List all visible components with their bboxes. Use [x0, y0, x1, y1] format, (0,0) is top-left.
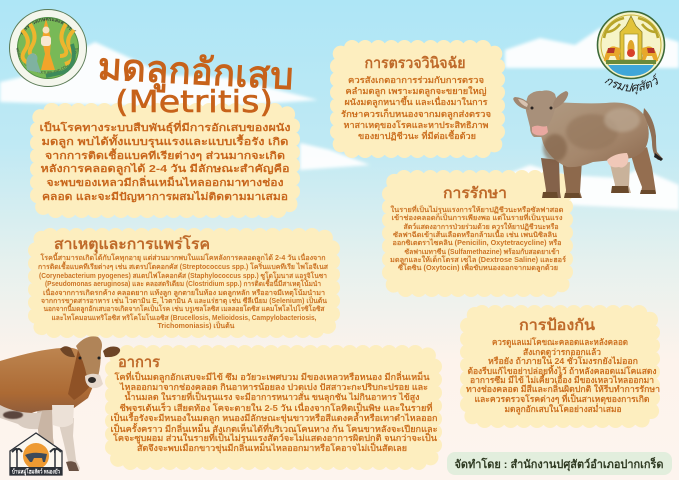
heading: prevention: การป้องกัน [519, 317, 596, 334]
prevention text: และควรตรวจโรคต่างๆ ที่เป็นสาเหตุของการเกิด [474, 392, 650, 405]
intro text [40, 120, 291, 203]
panel: symptoms [110, 353, 438, 462]
panel: causes [36, 234, 332, 330]
prevention text: หรือยัง ถ้าภายใน 24 ชั่วโมงรกยังไม่ออก [488, 354, 638, 366]
clouds [0, 28, 679, 210]
footer: organiser [447, 452, 672, 475]
icon: ministry of agriculture emblem: กระทรวงเกษตรและสหกรณ์ [20, 18, 76, 35]
prevention text [466, 337, 660, 415]
diagnosis text: หาสาเหตุของโรคและหาประสิทธิภาพ [344, 120, 489, 131]
causes text [38, 251, 329, 330]
panel: diagnosis [338, 48, 497, 150]
panel: intro [38, 111, 292, 210]
diagnosis text: ผนังมดลูกหนาขึ้น และเนื่องมาในการ [344, 95, 488, 108]
cow: left [0, 336, 120, 471]
causes text: โรคนี้สามารถเกิดได้กับโคทุกอายุ แต่ส่วนมากพบในแม่โคหลังการคลอดลูกได้ 2-4 วัน เนื่องจาก [39, 251, 325, 263]
prevention text: ต้องรีบแก้ไขอย่าปล่อยทิ้งไว้ ถ้าหลังคลอดแม่โคแสดง [468, 364, 656, 376]
treatment text: เข้าช่องคลอดก็เป็นการเพียงพอ แต่ในรายที่เป็นรุนแรง [392, 212, 563, 222]
symptoms text: สัดจึงจะพบเมือกขาวขุ่นมีกลิ่นเหม็นไหลออกมาหรือโคอาจไม่เป็นสัดเลย [137, 441, 407, 454]
causes text: จากการขาดสารอาหาร เช่น ไวตามิน E, ไวตามิน A และแร่ธาตุ เช่น ซีลีเนียม (Selenium) เป็นต้น [41, 296, 327, 305]
causes text: การติดเชื้อแบคทีเรียต่างๆ เช่น สเตรปโตคอกคัส (Streptococcus spp.) โคริ่นแบคทีเรีย ไพโอจีเนส [38, 260, 329, 271]
symptoms text: เป็นครั้งคราว มีกลิ่นเหม็น สังเกตเห็นได้ที่บริเวณโคนหาง ก้น โคนขาหลังจะเปียกและ [110, 422, 438, 434]
prevention text: สังเกตดูว่ารกออกแล้ว [523, 347, 601, 358]
intro text: คลอด และจะมีปัญหาการผสมไม่ติดตามมาเสมอ [42, 190, 288, 203]
causes text: และไทโคมอนแทริโอซิส ทริโคโมโนเอซิส (Brucellosis, Melioidosis, Campylobacteriosis, [52, 313, 317, 322]
causes text: นอกจากนี้มดลูกอักเสบอาจเกิดจากโคเป็นโรค เช่น บรูเซลโลซิส เมลลอยโดซิส แคมโพโลไปโรซิโอซิส [44, 302, 325, 314]
causes text: เนื่องจากการเกิดรกค้าง คลอดยาก แท้งลูก ลูกตายในท้อง มดลูกหลัก หรืออาจมีเหตุโน้มนำมา [43, 287, 325, 298]
intro text: จะพบของเหลวมีกลิ่นเหม็นไหลออกมาทางช่อง [46, 175, 284, 189]
heading: treatment: การรักษา [443, 185, 507, 202]
icon: ministry of agriculture emblem: MINISTRY OF AGRICULTURE AND COOPERATIVES [16, 48, 78, 74]
title: มดลูกอักเสบ [97, 46, 295, 100]
panel: treatment [390, 178, 566, 289]
symptoms text: โคจะซูบผอม ส่วนในรายที่เป็นไม่รุนแรงสัตว์จะไม่แสดงอาการผิดปกติ จนกว่าจะเป็น [112, 431, 437, 444]
icon: farm logo: บ้านหมู่โฮมสัตว์ หนองบัว [12, 468, 60, 476]
intro text: เป็นโรคทางระบบสืบพันธุ์ที่มีการอักเสบของผนัง [40, 120, 291, 134]
symptoms text [110, 370, 438, 454]
treatment text: ซี่โตซิน (Oxytocin) เพื่อขับหนองออกจากมดลูกด้วย [398, 262, 558, 273]
intro text: มดลูก พบได้ทั้งแบบรุนแรงและแบบเรื้อรัง เกิด [42, 134, 288, 149]
icon: department of livestock emblem [598, 12, 664, 78]
causes text: (Pseudomonas aeruginosa) และ คลอสตริเดียม (Clostridium spp.) การติดเชื้อนี้มีสาเหตุโน้มนำ [45, 277, 321, 288]
title [97, 46, 295, 120]
intro text: หลังการคลอดลูกได้ 2-4 วัน มีลักษณะสำคัญคือ [40, 162, 290, 176]
title: (Metritis) [115, 85, 273, 120]
diagnosis text: ควรสังเกตอาการร่วมกับการตรวจ [348, 75, 484, 85]
treatment text: ในรายที่เป็นไม่รุนแรงการให้ยาปฏิชีวนะหรือซัลฟาสอด [390, 204, 564, 214]
treatment text: ซัลฟาเมทาซีน (Sulfamethazine) พร้อมกับสอดยาเข้า [404, 247, 560, 256]
causes text: (Corynebacterium pyogenes) สแตปไฟโลคอกคัส (Staphylococcus spp.) ซูโดโมนาส แอรูจิโนซา [39, 271, 327, 281]
diagnosis text: รักษาควรเก็บหนองจากมดลูกส่งตรวจ [341, 107, 491, 120]
heading: causes: สาเหตุและการแพร่โรค [54, 234, 210, 254]
symptoms text: น้ำนมลด ในรายที่เป็นรุนแรง จะมีอาการหนาวสั่น ขนลุกชัน ไม่กินอาหาร ไข้สูง [124, 390, 420, 403]
prevention text: อาการซึม มีไข้ ไม่เคี้ยวเอื้อง มีของเหลวไหลออกมา [470, 373, 654, 385]
panel: prevention [466, 313, 660, 420]
cow: right [513, 90, 663, 198]
icon: farm logo [10, 433, 62, 476]
diagnosis text [341, 75, 491, 141]
symptoms text: เป็นเรื้อรังจะมีหนองในมดลูก หนองมีลักษณะขุ่นขาวหรือสีแดงคล้ำหรือเทาดำไหลออก [110, 411, 438, 424]
treatment text: ออกซิเตตราไซคลิน (Penicilin, Oxytetracycline) หรือ [392, 238, 562, 247]
prevention text: ทางช่องคลอด มีสีและกลิ่นผิดปกติ ให้รีบทำการรักษา [466, 382, 660, 394]
treatment text: ซัลฟาฉีดเข้าเส้นเลือดหรือกล้ามเนื้อ เช่น เพนนิซิลลิน [393, 228, 557, 239]
diagnosis text: คลำมดลูก เพราะมดลูกจะขยายใหญ่ [346, 86, 486, 97]
footer: organiser: จัดทำโดย : สำนักงานปศุสัตว์อำเภอปากเกร็ด [454, 457, 664, 472]
treatment text: มดลูกและให้เด็กโตรส เซไล (Dextrose Saline) และฮอร์ [390, 255, 566, 265]
symptoms text: ไหลออกมาจากช่องคลอด กินอาหารน้อยลง ปวดเบ่ง ปัสสาวะกะปริบกะปรอย และ [119, 382, 428, 392]
heading: symptoms: อาการ [118, 354, 161, 371]
treatment text [390, 204, 566, 273]
treatment text: สัตว์แสดงอาการป่วยร่วมด้วย ควรให้ยาปฏิชีวนะหรือ [404, 222, 558, 231]
causes text: Trichomoniasis) เป็นต้น [158, 321, 235, 330]
symptoms text: ชีพจรเต้นเร็ว เสียดท้อง โคจะตายใน 2-5 วัน เนื่องจากโลหิตเป็นพิษ และในรายที่ [120, 401, 433, 413]
intro text: จากการติดเชื้อแบคทีเรียต่างๆ ส่วนมากจะเกิด [45, 148, 285, 162]
heading: diagnosis: การตรวจวินิจฉัย [364, 54, 466, 72]
icon: ministry of agriculture emblem [9, 9, 87, 87]
label: department name: กรมปศุสัตว์ [604, 73, 658, 94]
prevention text: มดลูกอักเสบในโคอย่างสม่ำเสมอ [504, 402, 622, 415]
symptoms text: โคที่เป็นมดลูกอักเสบจะมีไข้ ซึม อวัยวะเพศบวม มีของเหลวหรือหนอง มีกลิ่นเหม็น [113, 370, 430, 383]
prevention text: ควรดูแลแม่โคขณะคลอดและหลังคลอด [492, 337, 628, 348]
diagnosis text: ของยาปฏิชีวนะ ที่มีต่อเชื้อด้วย [358, 129, 476, 141]
